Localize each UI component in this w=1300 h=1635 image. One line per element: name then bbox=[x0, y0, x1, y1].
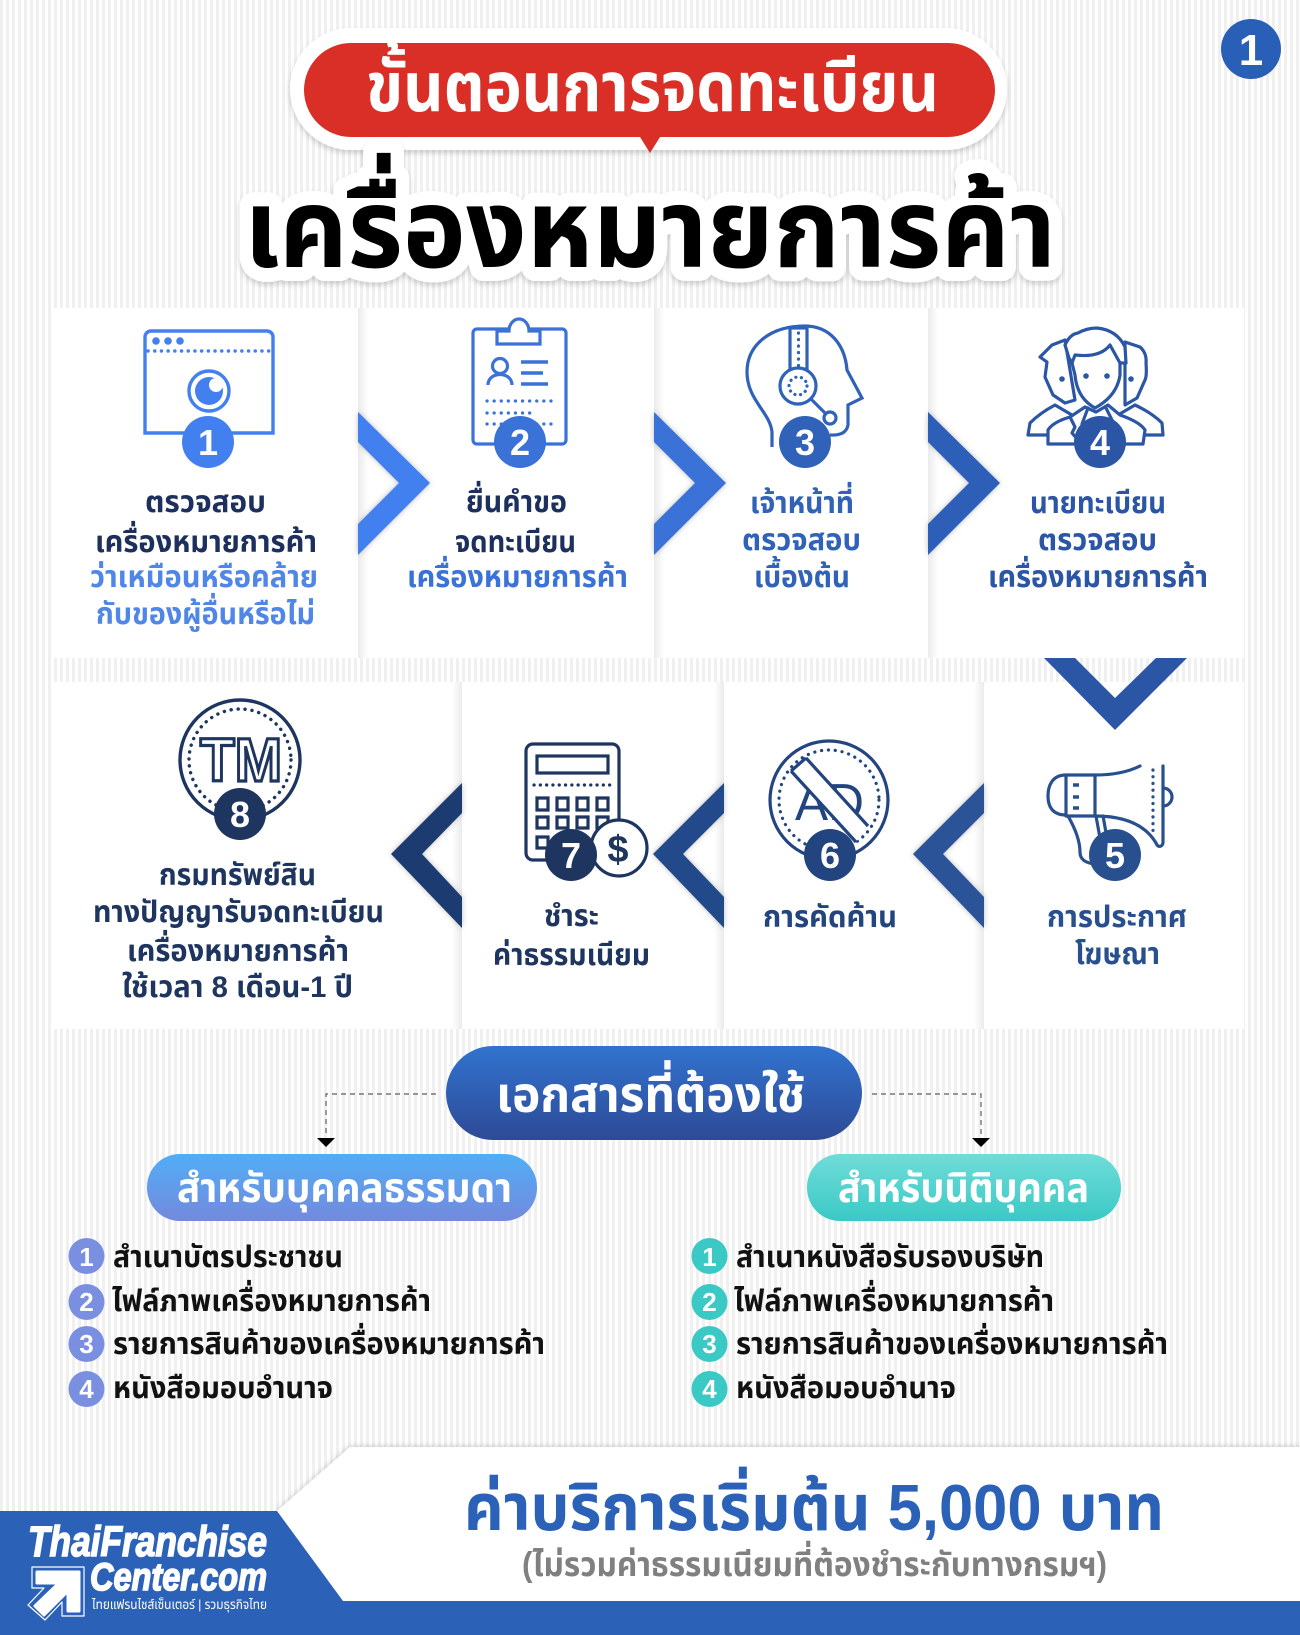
icon: head with headset bbox=[747, 326, 862, 447]
step 7 bbox=[493, 744, 650, 972]
text: step 1: ตรวจสอบ bbox=[145, 486, 266, 519]
panel: service fee footer bbox=[277, 1447, 1300, 1601]
badge: 8 bbox=[214, 788, 266, 840]
text: step 2: เครื่องหมายการค้า bbox=[407, 555, 628, 594]
text: step 4 bbox=[988, 487, 1208, 594]
badge: 2: 2 bbox=[510, 422, 530, 463]
text: step 6: การคัดค้าน bbox=[763, 901, 897, 934]
logo: ThaiFranchise Center bbox=[28, 1518, 267, 1620]
heading: required documents bbox=[446, 1046, 862, 1140]
list: natural person documents: สำเนาบัตรประชาชน bbox=[113, 1241, 343, 1274]
text: step 4: ตรวจสอบ bbox=[1038, 524, 1157, 557]
step 4 bbox=[988, 328, 1208, 594]
text: step 1: เครื่องหมายการค้า bbox=[95, 520, 317, 559]
text: logo wordmark bbox=[28, 1518, 267, 1612]
panel: bottom row of steps bbox=[52, 682, 1244, 1029]
badge: page number 1: 1 bbox=[1239, 26, 1263, 75]
icon: no advertising coin bbox=[770, 741, 888, 859]
text: step 7: ค่าธรรมเนียม bbox=[493, 939, 650, 972]
step 6 bbox=[763, 741, 897, 934]
text: step 2: จดทะเบียน bbox=[455, 526, 576, 559]
arrow: step 7 to 8 bbox=[391, 783, 462, 928]
arrow: step 1 to 2 bbox=[358, 412, 430, 555]
icon: clipboard with profile bbox=[473, 319, 566, 444]
badge: 1: 1 bbox=[198, 422, 218, 463]
text: step 3: ตรวจสอบ bbox=[742, 524, 861, 557]
text: step 8: เครื่องหมายการค้า bbox=[127, 929, 349, 968]
text: step 3 bbox=[742, 481, 861, 594]
step 5 bbox=[1047, 766, 1187, 971]
badge: 6: 6 bbox=[820, 835, 840, 876]
text: step 3: เจ้าหน้าที่ bbox=[750, 481, 854, 520]
text: step 3: เบื้องต้น bbox=[754, 555, 850, 594]
badge: 7 bbox=[545, 829, 597, 881]
icon: calculator and dollar coin: $ bbox=[607, 829, 629, 871]
text: step 1: กับของผู้อื่นหรือไม่ bbox=[96, 592, 315, 632]
icon: logo arrow bbox=[28, 1567, 84, 1620]
step 1 bbox=[90, 331, 318, 632]
icon: trademark coin bbox=[180, 700, 300, 820]
text: step 4: เครื่องหมายการค้า bbox=[988, 555, 1208, 594]
list: juristic person documents: 4 bbox=[702, 1374, 717, 1404]
badge: 7: 7 bbox=[561, 835, 581, 876]
text: logo wordmark: Center.com bbox=[90, 1556, 267, 1599]
list: juristic person documents: ไฟล์ภาพเครื่องหมายการค้า bbox=[734, 1279, 1054, 1318]
badge: 5: 5 bbox=[1105, 835, 1125, 876]
text: logo wordmark: ไทยแฟรนไชส์เซ็นเตอร์ | รวมธุรกิจไทย bbox=[91, 1597, 267, 1612]
text: step 8 bbox=[93, 859, 384, 1004]
text: fee note: (ไม่รวมค่าธรรมเนียมที่ต้องชำระกับทางกรมฯ) bbox=[522, 1540, 1107, 1584]
badge: 5 bbox=[1089, 829, 1141, 881]
arrow: dashed to juristic person bbox=[872, 1094, 990, 1147]
icon: trademark coin: TM bbox=[200, 726, 282, 794]
badge: 2 bbox=[494, 416, 546, 468]
badge: 8: 8 bbox=[230, 794, 250, 835]
arrow: dashed to natural person bbox=[317, 1094, 436, 1147]
heading pill: natural person: สำหรับบุคคลธรรมดา bbox=[177, 1165, 512, 1213]
arrow: step 6 to 7 bbox=[653, 783, 724, 928]
panel: top row of steps bbox=[52, 308, 1244, 658]
badge: 3 bbox=[779, 416, 831, 468]
heading pill: juristic person bbox=[807, 1154, 1121, 1221]
arrow: step 4 to 5 bbox=[1044, 658, 1187, 730]
text: step 5: การประกาศ bbox=[1047, 901, 1187, 934]
list: natural person documents: 1 bbox=[79, 1242, 94, 1272]
badge: page number 1 bbox=[1221, 19, 1281, 79]
icon: calculator and dollar coin bbox=[526, 744, 647, 876]
badge: 6 bbox=[804, 829, 856, 881]
heading pill: juristic person: สำหรับนิติบุคคล bbox=[838, 1165, 1089, 1213]
list: natural person documents: 2 bbox=[79, 1287, 94, 1317]
step 8 bbox=[93, 700, 384, 1004]
list: natural person documents bbox=[68, 1238, 545, 1407]
text: step 8: ทางปัญญารับจดทะเบียน bbox=[93, 896, 384, 929]
title: red speech bubble: ขั้นตอนการจดทะเบียน bbox=[366, 41, 939, 126]
icon: megaphone bbox=[1048, 766, 1172, 864]
text: step 2 bbox=[407, 480, 628, 594]
list: juristic person documents: 1 bbox=[702, 1242, 717, 1272]
text: step 5 bbox=[1047, 901, 1187, 971]
list: juristic person documents: หนังสือมอบอำนาจ bbox=[736, 1372, 956, 1405]
icon: browser window with eye bbox=[145, 331, 273, 433]
badge: 4 bbox=[1074, 416, 1126, 468]
list: natural person documents: 3 bbox=[79, 1329, 94, 1359]
text: step 5: โฆษณา bbox=[1075, 938, 1160, 971]
text: step 1 bbox=[90, 486, 318, 632]
list: natural person documents: รายการสินค้าของเครื่องหมายการค้า bbox=[113, 1322, 545, 1361]
list: juristic person documents: 3 bbox=[702, 1329, 717, 1359]
badge: 3: 3 bbox=[795, 422, 815, 463]
heading pill: natural person bbox=[147, 1154, 537, 1221]
list: natural person documents: ไฟล์ภาพเครื่องหมายการค้า bbox=[112, 1279, 431, 1318]
title: red speech bubble bbox=[290, 28, 1007, 153]
arrow: step 3 to 4 bbox=[928, 412, 1000, 555]
footer blue band bbox=[0, 1511, 1300, 1635]
text: step 8: กรมทรัพย์สิน bbox=[159, 859, 316, 892]
badge: 4: 4 bbox=[1090, 422, 1110, 463]
heading: required documents: เอกสารที่ต้องใช้ bbox=[496, 1060, 805, 1123]
icon: group of people bbox=[1028, 328, 1163, 444]
step 3 bbox=[742, 326, 862, 594]
text: step 1: ว่าเหมือนหรือคล้าย bbox=[90, 561, 318, 594]
text: logo wordmark: ThaiFranchise bbox=[28, 1518, 267, 1566]
text: step 4: นายทะเบียน bbox=[1030, 487, 1166, 520]
list: juristic person documents bbox=[692, 1238, 1168, 1407]
title: main heading: เครื่องหมายการค้า bbox=[244, 152, 1056, 291]
text: step 2: ยื่นคำขอ bbox=[466, 480, 567, 519]
list: natural person documents: หนังสือมอบอำนาจ bbox=[113, 1372, 333, 1405]
step 2 bbox=[407, 319, 628, 594]
badge: 1 bbox=[182, 416, 234, 468]
text: step 7: ชำระ bbox=[544, 900, 599, 933]
text: service fee: ค่าบริการเริ่มต้น 5,000 บาท bbox=[464, 1466, 1164, 1544]
list: juristic person documents: สำเนาหนังสือรับรองบริษัท bbox=[736, 1241, 1044, 1274]
icon: no advertising coin: AD bbox=[795, 774, 864, 832]
text: step 7 bbox=[493, 900, 650, 972]
arrow: step 2 to 3 bbox=[654, 412, 726, 555]
arrow: step 5 to 6 bbox=[913, 783, 984, 928]
list: juristic person documents: รายการสินค้าของเครื่องหมายการค้า bbox=[736, 1322, 1168, 1361]
list: natural person documents: 4 bbox=[79, 1374, 94, 1404]
list: juristic person documents: 2 bbox=[702, 1287, 717, 1317]
text: step 8: ใช้เวลา 8 เดือน-1 ปี bbox=[122, 971, 353, 1004]
